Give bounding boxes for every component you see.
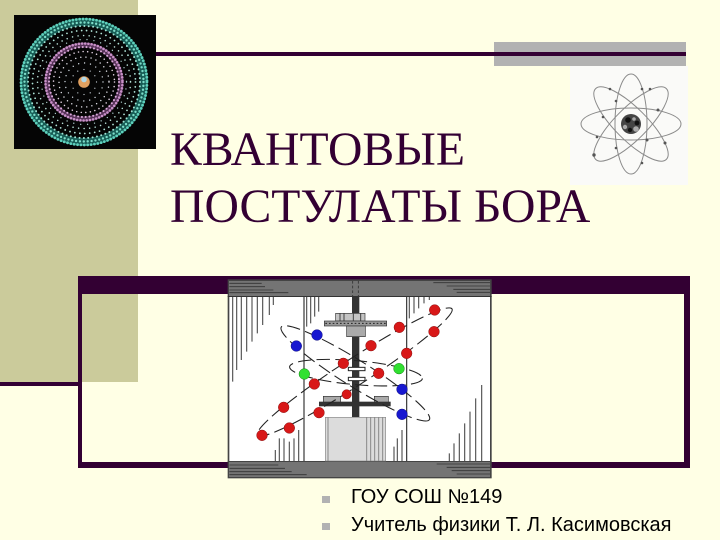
- sidebar panel: [0, 0, 138, 386]
- icon: glowing atom photo: [14, 15, 156, 149]
- icon: atom diagram: [570, 66, 688, 185]
- central shaft and machinery: [319, 297, 391, 461]
- bottom band: [228, 461, 492, 477]
- top rule with grey bar: [156, 42, 686, 66]
- bullet item: school: ГОУ СОШ №149: [351, 486, 502, 508]
- orbits: [250, 298, 459, 446]
- title: КВАНТОВЫЕ: [170, 123, 465, 176]
- hatching lines: [233, 297, 482, 461]
- bullet item: teacher: Учитель физики Т. Л. Касимовская: [351, 514, 672, 536]
- bullet list: [322, 486, 672, 536]
- top band: [228, 281, 492, 297]
- green electrons: [299, 363, 404, 379]
- title: ПОСТУЛАТЫ БОРА: [170, 180, 591, 233]
- picture: atom model with orbits: [228, 279, 492, 478]
- red electrons: [257, 305, 440, 441]
- content frame: [78, 276, 690, 468]
- blue electrons: [291, 330, 407, 420]
